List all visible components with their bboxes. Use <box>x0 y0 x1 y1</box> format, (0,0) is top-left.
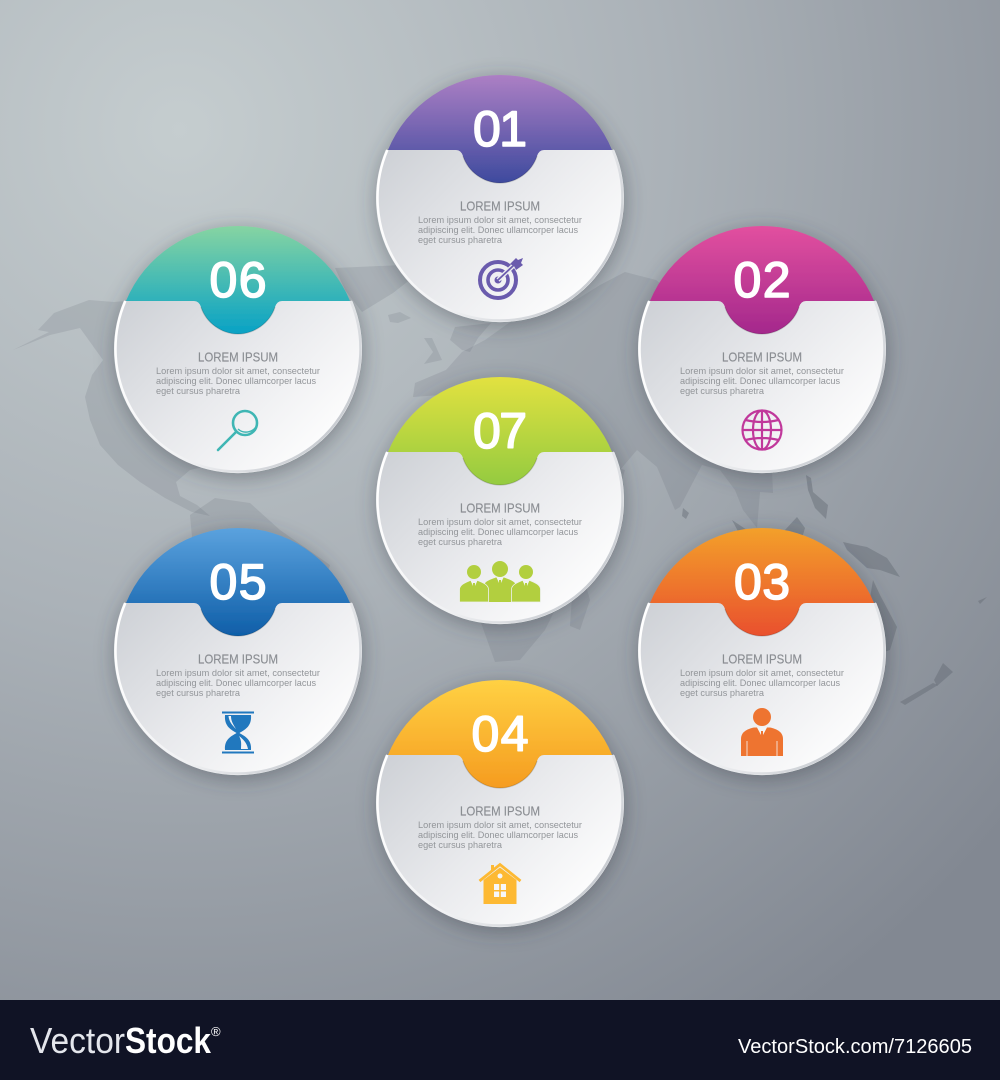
card shape: magenta cap, tab and white body <box>638 226 886 473</box>
body text: eget cursus pharetra <box>156 688 241 698</box>
body text: Lorem ipsum dolor sit amet, consectetur <box>156 366 320 376</box>
body text <box>418 215 582 245</box>
heading: LOREM IPSUM <box>722 350 802 364</box>
card shape: yellow cap, tab and white body <box>376 680 624 927</box>
card shape: teal cap, tab and white body <box>114 226 362 473</box>
logo: VectorStock: ® <box>211 1024 221 1039</box>
body text: eget cursus pharetra <box>156 386 241 396</box>
body text: Lorem ipsum dolor sit amet, consectetur <box>418 820 582 830</box>
footer bar <box>0 1000 1000 1080</box>
logo: VectorStock: Stock <box>125 1020 212 1061</box>
icon: hourglass <box>222 712 254 754</box>
body text <box>418 517 582 547</box>
number: 03 <box>734 554 790 610</box>
heading: LOREM IPSUM <box>198 350 278 364</box>
heading: LOREM IPSUM <box>460 200 540 214</box>
card 02 <box>638 226 886 473</box>
logo: VectorStock <box>30 1020 221 1061</box>
body text: adipiscing elit. Donec ullamcorper lacus <box>680 678 840 688</box>
body text: eget cursus pharetra <box>418 537 503 547</box>
icon: person <box>741 708 783 756</box>
card shape: purple cap, tab and white body <box>376 75 624 322</box>
body text: Lorem ipsum dolor sit amet, consectetur <box>156 668 320 678</box>
world map <box>13 265 987 705</box>
body text: adipiscing elit. Donec ullamcorper lacus <box>680 376 840 386</box>
icon: globe <box>742 410 782 450</box>
card shape: lime cap, tab and white body <box>376 377 624 624</box>
body text: Lorem ipsum dolor sit amet, consectetur <box>680 668 844 678</box>
heading: LOREM IPSUM <box>460 804 540 818</box>
number: 01 <box>473 101 527 157</box>
body text: eget cursus pharetra <box>680 688 765 698</box>
card 05 <box>114 528 362 775</box>
card shape: orange cap, tab and white body <box>638 528 886 775</box>
body text: adipiscing elit. Donec ullamcorper lacus <box>156 376 316 386</box>
heading: LOREM IPSUM <box>722 652 802 666</box>
number: 04 <box>472 706 528 762</box>
number: 05 <box>210 554 266 610</box>
body text: adipiscing elit. Donec ullamcorper lacus <box>418 527 578 537</box>
body text: Lorem ipsum dolor sit amet, consectetur <box>418 517 582 527</box>
icon: target <box>480 258 523 298</box>
icon: team of three people <box>460 561 540 602</box>
card 03 <box>638 528 886 775</box>
body text: adipiscing elit. Donec ullamcorper lacus <box>418 830 578 840</box>
card 01 <box>376 75 624 322</box>
body text: eget cursus pharetra <box>418 840 503 850</box>
image id: VectorStock.com/7126605 <box>738 1036 972 1058</box>
body text: Lorem ipsum dolor sit amet, consectetur <box>418 215 582 225</box>
icon: magnifier <box>218 411 257 450</box>
heading: LOREM IPSUM <box>460 502 540 516</box>
card 04 <box>376 680 624 927</box>
card 06 <box>114 226 362 473</box>
body text <box>418 820 582 850</box>
body text: Lorem ipsum dolor sit amet, consectetur <box>680 366 844 376</box>
number: 07 <box>473 403 527 459</box>
icon: house <box>480 864 520 904</box>
body text: adipiscing elit. Donec ullamcorper lacus <box>156 678 316 688</box>
card 07 <box>376 377 624 624</box>
logo: VectorStock: Vector <box>30 1020 125 1061</box>
number: 02 <box>734 252 790 308</box>
body text <box>156 668 320 698</box>
body text: eget cursus pharetra <box>418 235 503 245</box>
body text <box>680 668 844 698</box>
heading: LOREM IPSUM <box>198 652 278 666</box>
body text: eget cursus pharetra <box>680 386 765 396</box>
body text: adipiscing elit. Donec ullamcorper lacus <box>418 225 578 235</box>
number: 06 <box>210 252 266 308</box>
body text <box>680 366 844 396</box>
body text <box>156 366 320 396</box>
card shape: blue cap, tab and white body <box>114 528 362 775</box>
